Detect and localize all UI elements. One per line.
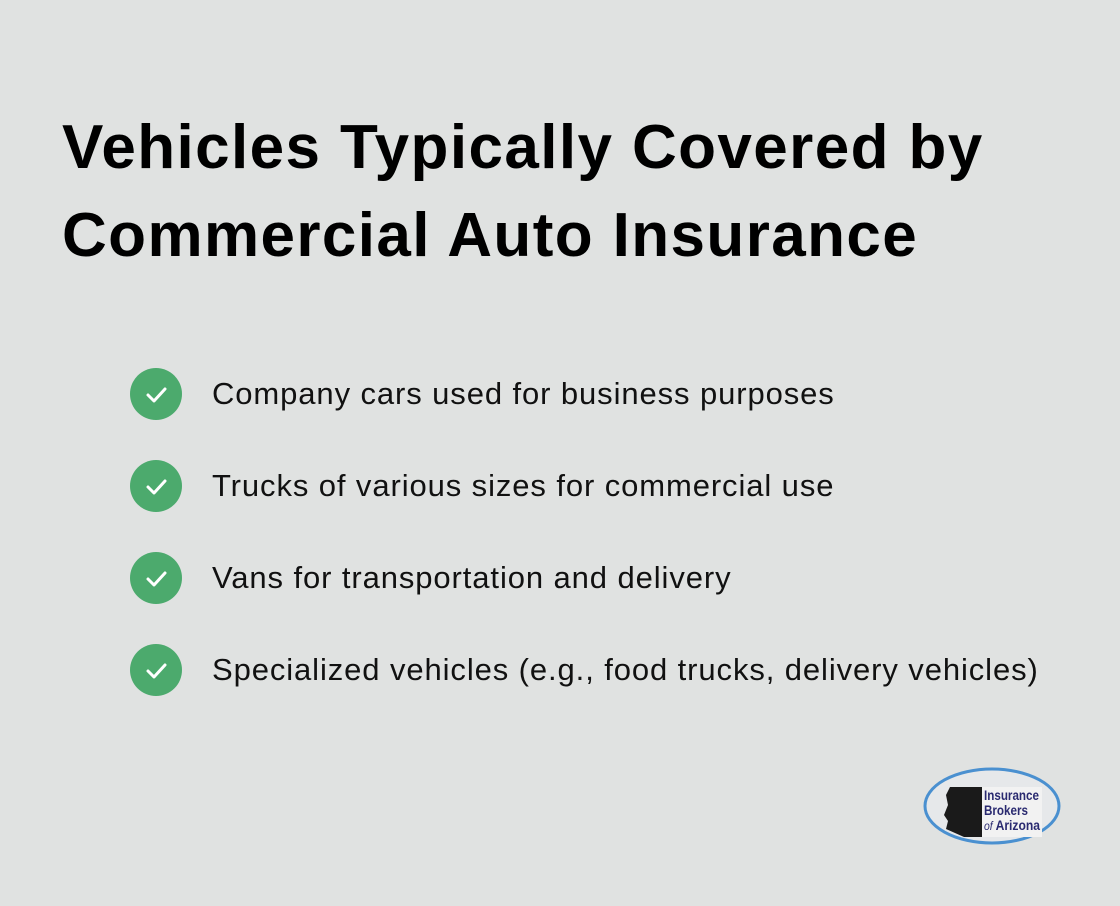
logo: of Arizona: [984, 817, 1040, 833]
text: Specialized vehicles (e.g., food trucks, delivery vehicles): [212, 652, 1039, 687]
text: Company cars used for business purposes: [212, 376, 835, 411]
title: Commercial Auto Insurance: [62, 201, 918, 270]
list item 3: [130, 552, 731, 604]
icon: check: [130, 368, 182, 420]
list item 1: [130, 368, 835, 420]
logo: Brokers: [984, 802, 1028, 818]
list item 4: [130, 644, 1039, 696]
icon: check: [130, 644, 182, 696]
icon: check: [130, 460, 182, 512]
title: Vehicles Typically Covered by: [62, 113, 984, 182]
text: Trucks of various sizes for commercial use: [212, 468, 834, 503]
title: [62, 113, 984, 270]
icon: check: [130, 552, 182, 604]
logo: Insurance: [984, 787, 1039, 803]
list item 2: [130, 460, 834, 512]
logo: [924, 768, 1060, 844]
text: Vans for transportation and delivery: [212, 560, 731, 595]
